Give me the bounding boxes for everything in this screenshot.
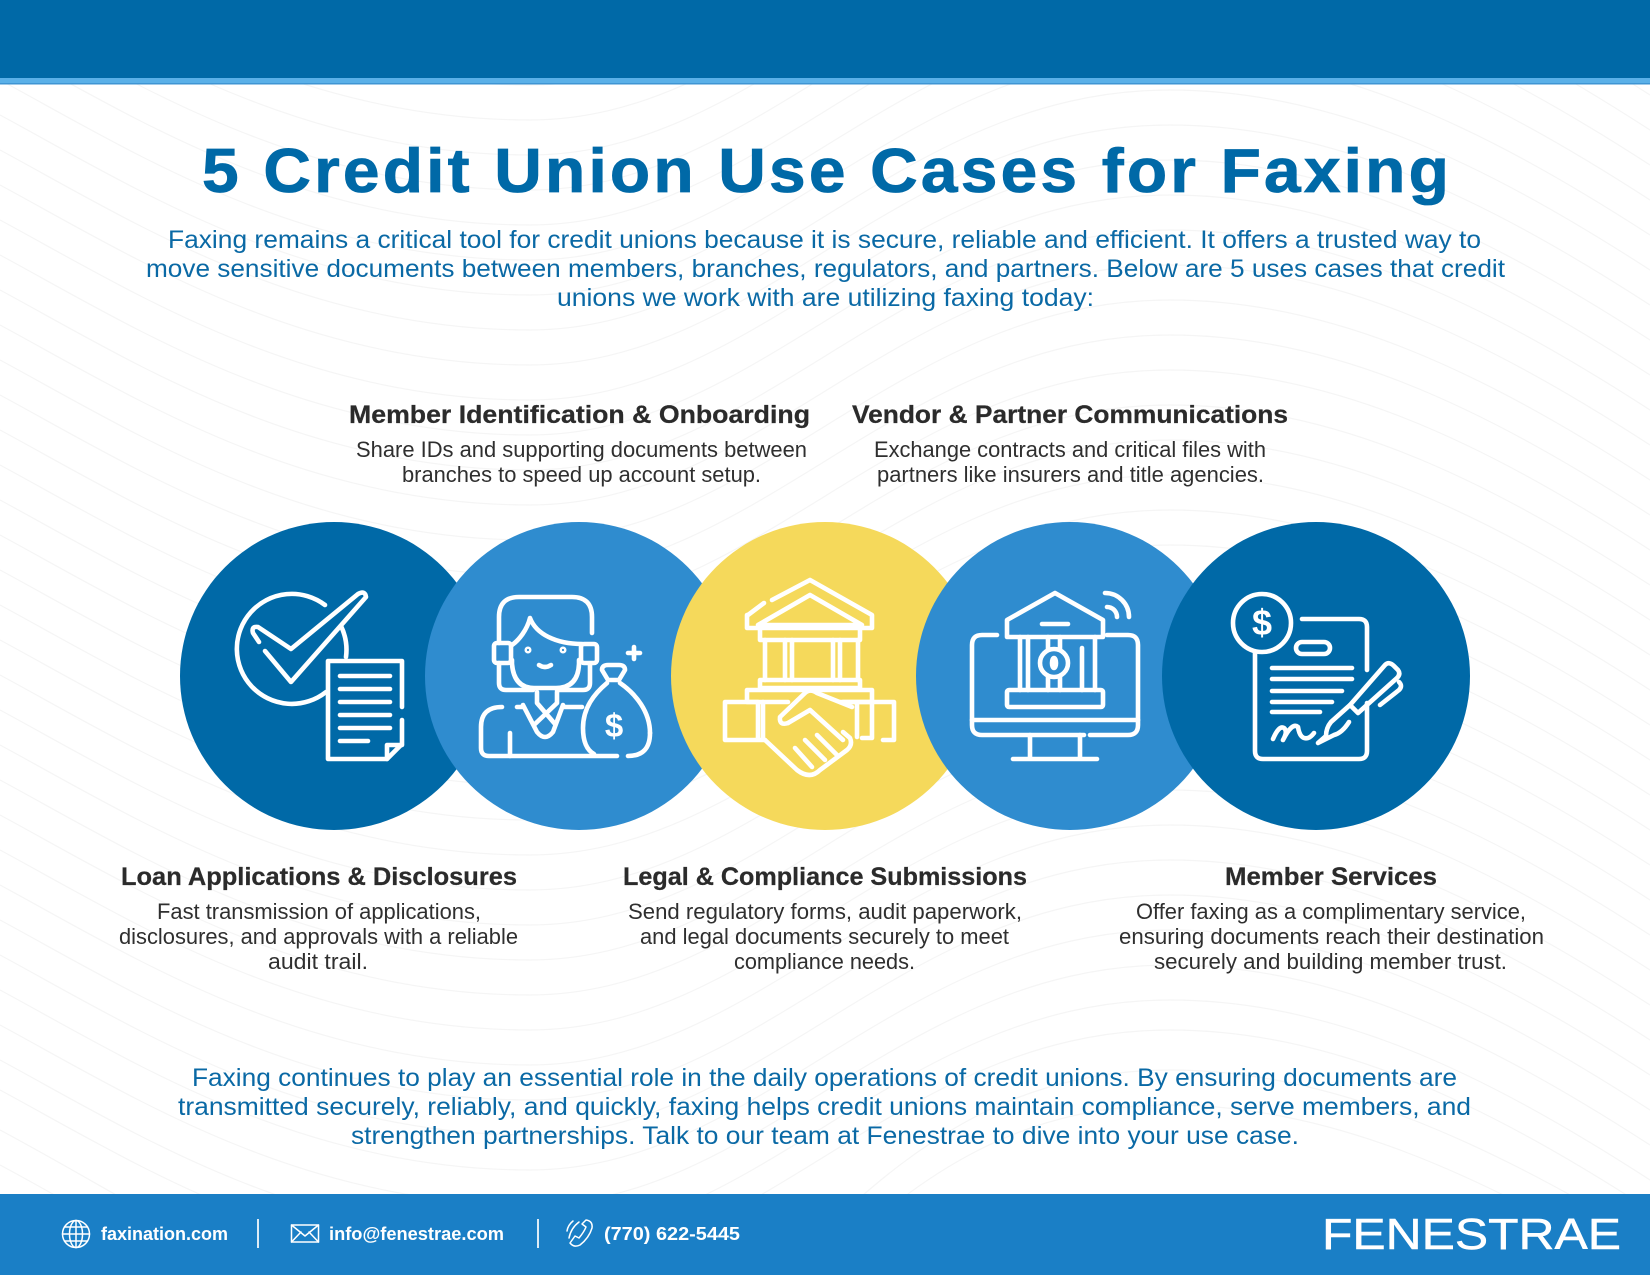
envelope icon (292, 1225, 318, 1242)
title: 5 Credit Union Use Cases for Faxing (202, 137, 1452, 206)
use case text: vendor and partner communications: Exchange contracts and critical files with (874, 437, 1266, 462)
use case text: legal and compliance submissions: and legal documents securely to meet (640, 924, 1009, 949)
use case text: member identification and onboarding: Member Identification & Onboarding (349, 401, 810, 429)
top header band (0, 0, 1650, 84)
use case text: loan applications and disclosures: Loan Applications & Disclosures (121, 863, 517, 891)
use case text: member identification and onboarding: Share IDs and supporting documents between (356, 437, 807, 462)
icon: check mark and document (237, 593, 402, 759)
icon text: dollar sign on bag: $ (605, 707, 623, 744)
use case text: legal and compliance submissions: Legal & Compliance Submissions (623, 863, 1027, 891)
footer website: faxination.com (101, 1224, 228, 1244)
closing paragraph: transmitted securely, reliably, and quickly, faxing helps credit unions maintain compliance, serve members, and (178, 1093, 1471, 1121)
use case text: vendor and partner communications: Vendor & Partner Communications (852, 401, 1288, 429)
intro paragraph: Faxing remains a critical tool for credit unions because it is secure, reliable and efficient. It offers a trusted way to (168, 226, 1481, 254)
use case text: legal and compliance submissions (623, 863, 1027, 974)
footer email: info@fenestrae.com (329, 1224, 504, 1244)
icon: bank and handshake (725, 580, 894, 775)
use case text: loan applications and disclosures: disclosures, and approvals with a reliable (119, 924, 518, 949)
use case text: legal and compliance submissions: compliance needs. (734, 949, 915, 974)
intro paragraph: unions we work with are utilizing faxing today: (557, 284, 1094, 312)
circle: member identification (425, 522, 733, 830)
use case text: vendor and partner communications: partners like insurers and title agencies. (877, 462, 1264, 487)
intro paragraph: move sensitive documents between members, branches, regulators, and partners. Below are 5 uses cases that credit (146, 255, 1505, 283)
use case text: member services: securely and building member trust. (1154, 949, 1507, 974)
use case text: member services (1119, 863, 1544, 974)
use case text: legal and compliance submissions: Send regulatory forms, audit paperwork, (628, 899, 1022, 924)
use case text: loan applications and disclosures: Fast transmission of applications, (157, 899, 481, 924)
icon: online banking monitor (972, 593, 1138, 759)
icon: woman with money bag (481, 597, 650, 756)
use case text: loan applications and disclosures (119, 863, 518, 974)
circle: legal and compliance (671, 522, 979, 830)
use case text: loan applications and disclosures: audit trail. (268, 949, 368, 974)
use case text: member services: Offer faxing as a complimentary service, (1136, 899, 1526, 924)
footer bar (0, 1194, 1650, 1275)
use case text: member identification and onboarding: branches to speed up account setup. (402, 462, 761, 487)
intro paragraph (146, 226, 1505, 312)
circle: loan applications (180, 522, 488, 830)
use case text: member services: ensuring documents reach their destination (1119, 924, 1544, 949)
footer separators (258, 1219, 538, 1248)
closing paragraph: Faxing continues to play an essential role in the daily operations of credit unions. By ensuring documents are (192, 1064, 1457, 1092)
use case text: member identification and onboarding (349, 401, 810, 487)
closing paragraph: strengthen partnerships. Talk to our team at Fenestrae to dive into your use case. (351, 1122, 1299, 1150)
use case text: member services: Member Services (1225, 863, 1437, 891)
closing paragraph (178, 1064, 1471, 1150)
phone icon (567, 1220, 592, 1246)
use case text: vendor and partner communications (852, 401, 1288, 487)
logo wordmark: FENESTRAE (1322, 1210, 1621, 1259)
icon: signed document with coin (1233, 594, 1401, 759)
circle: member services (1162, 522, 1470, 830)
circle: vendor and partner (916, 522, 1224, 830)
icon text: dollar sign on coin: $ (1252, 602, 1272, 643)
footer phone: (770) 622-5445 (604, 1224, 740, 1244)
icon: globe (62, 1220, 90, 1248)
